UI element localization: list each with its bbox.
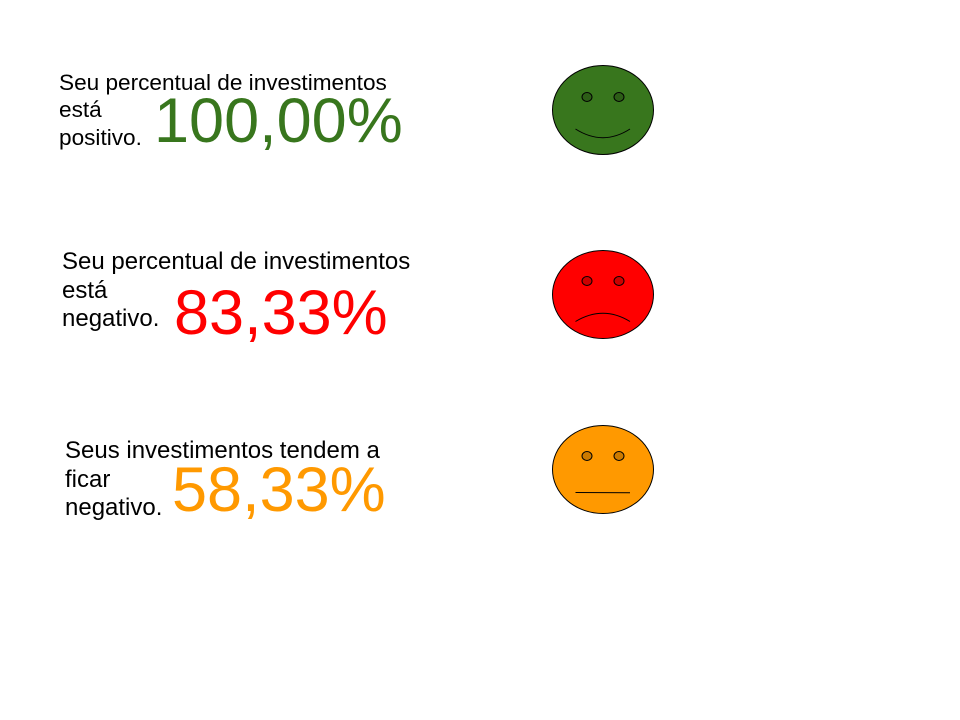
- text: warning message: ficar: [65, 466, 110, 493]
- text: warning message: [65, 437, 380, 521]
- panel: positive investment text: [59, 70, 403, 156]
- text: warning message: negativo.: [65, 494, 162, 521]
- panel: warning investment text: [65, 437, 386, 525]
- text: positive message: [59, 70, 387, 150]
- text: negative message: Seu percentual de investimentos: [62, 248, 410, 275]
- text: negative message: está: [62, 277, 107, 304]
- text: negative message: [62, 248, 410, 332]
- number: 83,33%: 83,33%: [174, 278, 388, 348]
- text: positive message: positivo.: [59, 125, 142, 150]
- number: 58,33%: 58,33%: [172, 455, 386, 525]
- number: 100,00%: 100,00%: [154, 86, 403, 156]
- icon: green happy face: [552, 66, 654, 154]
- panel: negative investment text: [62, 248, 410, 348]
- icon: red sad face: [552, 250, 654, 338]
- text: warning message: Seus investimentos tendem a: [65, 437, 380, 464]
- text: negative message: negativo.: [62, 305, 159, 332]
- text: positive message: está: [59, 97, 102, 122]
- icon: orange neutral face: [552, 426, 654, 514]
- text: positive message: Seu percentual de investimentos: [59, 70, 387, 95]
